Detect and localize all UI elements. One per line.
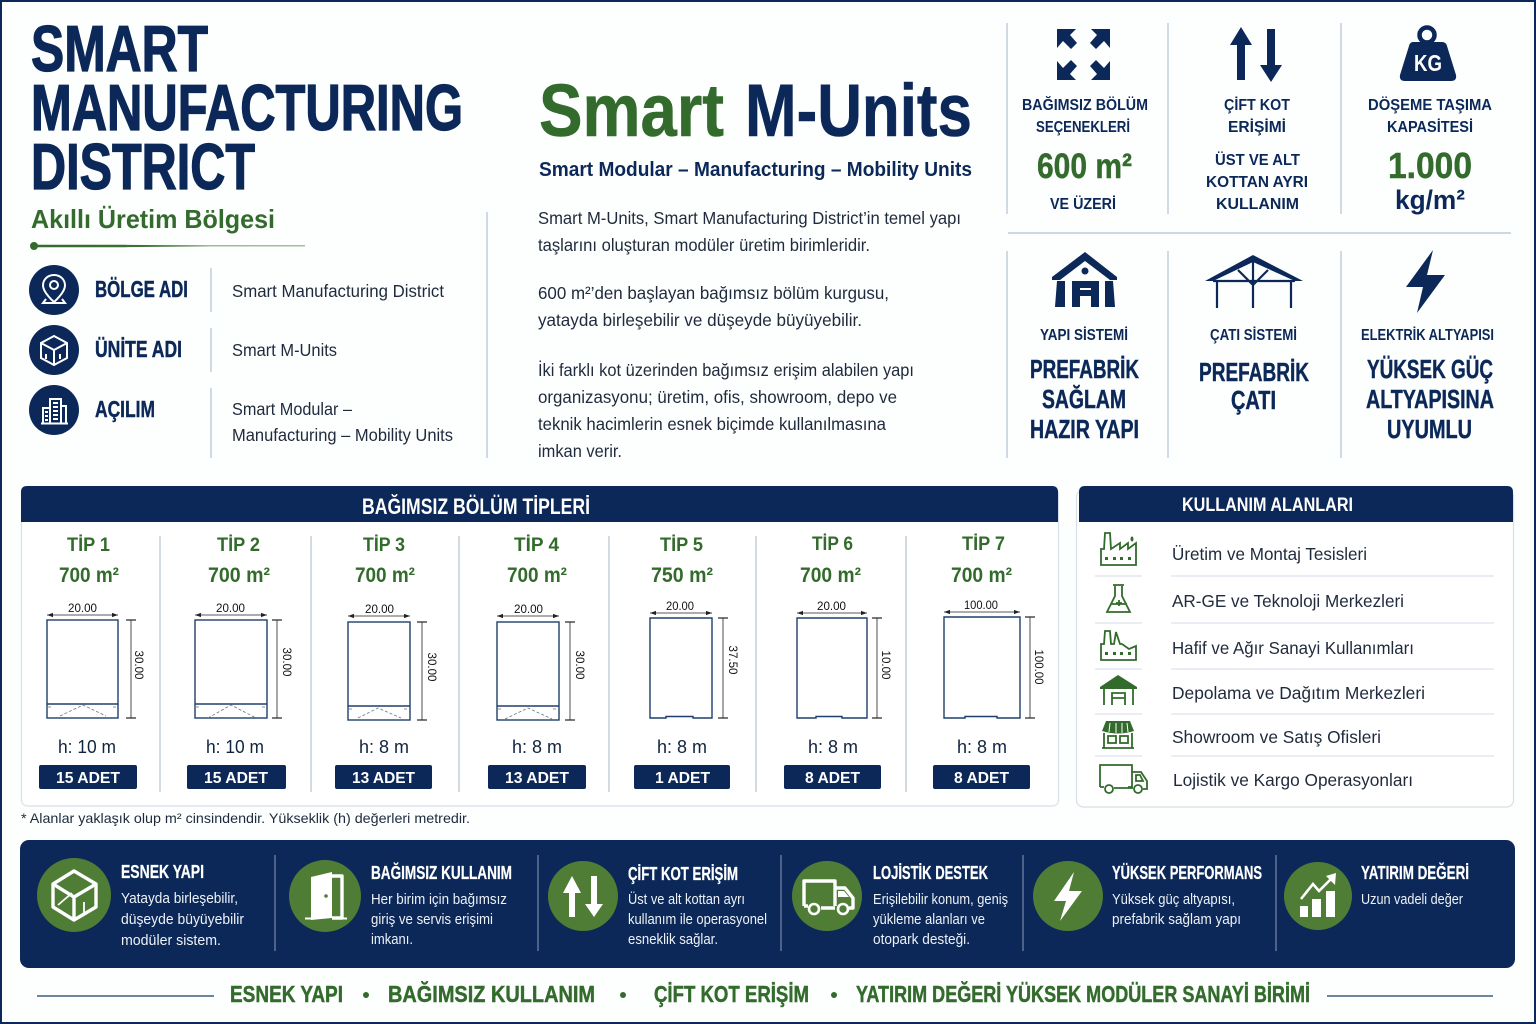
type card: Tip 1: TİP 1	[67, 535, 110, 556]
spec: Döşeme taşıma kapasitesi: 1.000	[1388, 145, 1472, 186]
icon: location pin	[29, 265, 79, 315]
type card: Tip 1	[39, 535, 144, 789]
icon: growth chart	[1284, 862, 1352, 930]
footnote: * Alanlar yaklaşık olup m² cinsindendir. Yükseklik (h) değerleri metredir.	[21, 810, 470, 826]
icon: lightning bolt	[1406, 250, 1445, 313]
floor plan	[497, 604, 585, 720]
count badge: 8 ADET	[805, 770, 860, 787]
spec: Çift kot erişimi	[1206, 27, 1308, 213]
type card: Tip 5: h: 8 m	[657, 737, 707, 757]
description text: Smart M-Units, Smart Manufacturing District’in temel yapı	[538, 208, 961, 228]
info row: Açılım: Smart Modular –	[232, 399, 352, 419]
feature: Bağımsız kullanım	[289, 860, 512, 948]
floor plan	[348, 604, 437, 720]
icon: shop	[1102, 721, 1134, 748]
floor plan: 100.00	[1032, 650, 1044, 684]
description text: yatayda birleşebilir ve düşeyde büyüyebilir.	[538, 310, 862, 330]
floor plan: 20.00	[666, 601, 694, 613]
floor plan: 10.00	[879, 650, 891, 680]
floor plan: 37.50	[726, 646, 738, 674]
type card: Tip 4	[488, 535, 586, 789]
usage row: Hafif ve Ağır Sanayi	[1101, 631, 1414, 660]
usage row: Depolama ve Dağıtım: Depolama ve Dağıtım Merkezleri	[1172, 683, 1425, 703]
floor plan: 20.00	[68, 603, 97, 615]
info row: Açılım: AÇILIM	[95, 396, 155, 422]
spec: Çatı sistemi: PREFABRİK	[1199, 357, 1309, 387]
spec: Bağımsız bölüm seçenekleri: BAĞIMSIZ BÖLÜM	[1022, 95, 1148, 114]
spec: Yapı sistemi: YAPI SİSTEMİ	[1040, 326, 1128, 344]
type card: Tip 7: h: 8 m	[957, 737, 1007, 757]
info row: Bölge adı: Smart Manufacturing District	[232, 281, 444, 301]
spec: Döşeme taşıma kapasitesi: DÖŞEME TAŞIMA	[1368, 95, 1492, 114]
floor plan	[195, 603, 292, 718]
icon: truck	[1100, 765, 1147, 793]
description text: taşlarını oluşturan modüler üretim birimleridir.	[538, 235, 870, 255]
count badge: 15 ADET	[56, 770, 120, 787]
panel header	[21, 486, 1058, 522]
count badge: 8 ADET	[954, 770, 1009, 787]
type card: Tip 6	[784, 534, 891, 789]
type card: Tip 1: h: 10 m	[58, 737, 116, 757]
count badge	[933, 765, 1030, 789]
icon: KG weight: KG	[1414, 50, 1442, 76]
icon: cube	[37, 858, 111, 932]
type card: Tip 7	[933, 534, 1044, 789]
count badge: 13 ADET	[505, 770, 569, 787]
count badge	[187, 765, 286, 789]
feature: Yatırım değeri: Uzun vadeli değer	[1361, 891, 1463, 908]
icon: up and down arrows	[1230, 27, 1282, 82]
slogan strip: ESNEK YAPI	[230, 981, 343, 1007]
feature: Çift kot erişim: kullanım ile operasyonel	[628, 911, 767, 928]
info row: Açılım	[29, 385, 453, 458]
feature: Esnek yapı: ESNEK YAPI	[121, 861, 204, 882]
type card: Tip 1: 700 m²	[59, 564, 119, 587]
spec: Bağımsız bölüm seçenekleri	[1022, 29, 1148, 213]
type card: Tip 6: 700 m²	[800, 564, 861, 587]
floor plan: 30.00	[573, 650, 585, 680]
info row: Ünite adı: Smart M-Units	[232, 340, 337, 360]
feature: Yüksek performans: YÜKSEK PERFORMANS	[1112, 862, 1262, 883]
icon: flask	[1107, 585, 1130, 612]
type card: Tip 3: TİP 3	[363, 535, 405, 556]
icon: prefabricated building	[1052, 252, 1117, 307]
info row: Açılım: Manufacturing – Mobility Units	[232, 425, 453, 445]
spec: Çift kot erişimi: ÜST VE ALT	[1215, 150, 1300, 169]
feature: Lojistik destek: yükleme alanları ve	[873, 911, 985, 928]
spec: Çatı sistemi	[1199, 255, 1309, 415]
usage row: Lojistik	[1100, 765, 1413, 793]
feature: Yatırım değeri: YATIRIM DEĞERİ	[1361, 862, 1469, 883]
spec: Döşeme taşıma kapasitesi	[1368, 28, 1492, 215]
info row: Bölge adı	[29, 265, 444, 315]
spec: Bağımsız bölüm seçenekleri: VE ÜZERİ	[1050, 194, 1116, 213]
type card: Tip 5: 750 m²	[651, 564, 713, 587]
feature: Bağımsız kullanım: Her birim için bağımsız	[371, 891, 507, 908]
spec: Çift kot erişimi: ÇİFT KOT	[1224, 96, 1290, 114]
feature: Yatırım değeri	[1284, 862, 1469, 930]
spec: Çift kot erişimi: ERİŞİMİ	[1228, 118, 1286, 136]
type card: Tip 2: h: 10 m	[206, 737, 264, 757]
spec: Elektrik altyapısı: YÜKSEK GÜÇ	[1367, 354, 1493, 384]
feature: Çift kot erişim: esneklik sağlar.	[628, 931, 718, 948]
spec: Döşeme taşıma kapasitesi: kg/m²	[1395, 185, 1465, 215]
tagline: Smart Modular – Manufacturing – Mobility Units	[539, 159, 972, 181]
feature: Esnek yapı: Yatayda birleşebilir,	[121, 890, 238, 907]
type card: Tip 4: TİP 4	[514, 535, 559, 556]
floor plan: 30.00	[132, 650, 144, 680]
description text	[538, 208, 961, 461]
count badge	[39, 765, 137, 789]
description text: 600 m²’den başlayan bağımsız bölüm kurgusu,	[538, 283, 889, 303]
feature: Çift kot erişim	[548, 861, 767, 948]
panel header: BAĞIMSIZ BÖLÜM TİPLERİ	[362, 494, 590, 519]
info row: Bölge adı: BÖLGE ADI	[95, 276, 188, 302]
type card: Tip 2: TİP 2	[217, 535, 260, 556]
spec: Bağımsız bölüm seçenekleri: 600 m²	[1037, 147, 1132, 186]
icon: warehouse	[1100, 675, 1137, 705]
type card: Tip 2: 700 m²	[208, 564, 270, 587]
feature: Esnek yapı: modüler sistem.	[121, 932, 221, 949]
slogan strip: BAĞIMSIZ KULLANIM	[388, 980, 595, 1007]
subtitle: Akıllı Üretim Bölgesi: Akıllı Üretim Bölgesi	[31, 204, 275, 234]
floor plan	[944, 600, 1044, 718]
usage row: AR-GE: AR-GE ve Teknoloji Merkezleri	[1172, 591, 1404, 611]
type card: Tip 6: TİP 6	[812, 534, 853, 555]
spec: Bağımsız bölüm seçenekleri: SEÇENEKLERİ	[1036, 118, 1130, 136]
floor plan	[47, 603, 144, 718]
feature: Bağımsız kullanım: giriş ve servis erişimi	[371, 911, 493, 928]
spec: Elektrik altyapısı: ALTYAPISINA	[1366, 384, 1494, 414]
floor plan: 20.00	[216, 603, 245, 615]
panel: Kullanım alanları	[1076, 486, 1514, 807]
type card: Tip 5: TİP 5	[660, 535, 703, 556]
feature: Yüksek performans: prefabrik sağlam yapı	[1112, 911, 1241, 928]
title: Smart Manufacturing District	[31, 12, 463, 203]
feature: Lojistik destek	[792, 861, 1008, 948]
feature: Bağımsız kullanım: imkanı.	[371, 931, 413, 948]
type card: Tip 7: TİP 7	[962, 534, 1005, 555]
title: Smart Manufacturing District: DISTRICT	[31, 130, 255, 203]
spec: Yapı sistemi: HAZIR YAPI	[1030, 414, 1139, 444]
spec: Elektrik altyapısı: ELEKTRİK ALTYAPISI	[1361, 326, 1494, 344]
type card: Tip 5	[634, 535, 738, 789]
panel header	[1079, 486, 1513, 522]
type card: Tip 4: h: 8 m	[512, 737, 562, 757]
description text: teknik hacimlerin esnek biçimde kullanılmasına	[538, 414, 886, 434]
feature: Esnek yapı	[37, 858, 244, 949]
count badge	[784, 765, 881, 789]
count badge: 15 ADET	[204, 770, 268, 787]
spec: Döşeme taşıma kapasitesi: KAPASİTESİ	[1387, 118, 1473, 136]
floor plan	[650, 601, 738, 718]
info row: Ünite adı: ÜNİTE ADI	[95, 336, 182, 362]
usage row: Üretim ve Montaj	[1101, 533, 1367, 565]
type card: Tip 3: h: 8 m	[359, 737, 409, 757]
heading: Smart M-Units: M-Units	[745, 69, 972, 152]
floor plan: 20.00	[817, 601, 846, 613]
spec: Yapı sistemi: SAĞLAM	[1042, 384, 1126, 414]
heading: Smart M-Units: Smart	[539, 69, 724, 152]
usage row: Lojistik: Lojistik ve Kargo Operasyonları	[1173, 770, 1413, 790]
panel: feature band	[20, 840, 1515, 968]
icon: up and down arrows	[548, 861, 618, 931]
heading: Smart M-Units	[539, 69, 972, 152]
icon: door	[289, 860, 361, 932]
spec: Elektrik altyapısı	[1361, 250, 1494, 444]
usage row: Üretim ve Montaj: Üretim ve Montaj Tesisleri	[1172, 544, 1367, 564]
usage row: Depolama ve Dağıtım	[1100, 675, 1425, 705]
spec: Çatı sistemi: ÇATI SİSTEMİ	[1210, 326, 1297, 344]
title: Smart Manufacturing District: SMART	[31, 12, 208, 85]
spec: Yapı sistemi	[1030, 252, 1139, 444]
icon: KG weight	[1400, 28, 1456, 81]
slogan strip	[230, 980, 1310, 1007]
type card: Tip 4: 700 m²	[507, 564, 567, 587]
icon: roof truss	[1205, 255, 1303, 308]
description text: imkan verir.	[538, 441, 622, 461]
floor plan: 100.00	[964, 600, 998, 612]
type card: Tip 3	[335, 535, 437, 789]
floor plan: 20.00	[365, 604, 394, 616]
spec: Çatı sistemi: ÇATI	[1231, 385, 1276, 415]
icon: box	[29, 325, 79, 375]
spec: Yapı sistemi: PREFABRİK	[1030, 354, 1139, 384]
slogan strip: ÇİFT KOT ERİŞİM	[654, 981, 809, 1007]
usage row: Showroom	[1102, 721, 1381, 748]
feature: Lojistik destek: otopark desteği.	[873, 931, 970, 948]
icon: truck	[792, 861, 862, 931]
feature: Yüksek performans	[1033, 861, 1262, 931]
feature: Esnek yapı: düşeyde büyüyebilir	[121, 911, 244, 928]
panel: Bağımsız bölüm tipleri	[21, 486, 1058, 806]
icon: factory with chimneys	[1101, 631, 1136, 660]
floor plan: 30.00	[280, 648, 292, 676]
usage row: Hafif ve Ağır Sanayi: Hafif ve Ağır Sanayi Kullanımları	[1172, 638, 1414, 658]
spec: Çift kot erişimi: KOTTAN AYRI	[1206, 174, 1308, 191]
feature: Yüksek performans: Yüksek güç altyapısı,	[1112, 891, 1235, 908]
floor plan	[797, 601, 891, 718]
usage row: Showroom: Showroom ve Satış Ofisleri	[1172, 727, 1381, 747]
slogan strip: YATIRIM DEĞERİ YÜKSEK MODÜLER SANAYİ BİRİMİ	[856, 980, 1310, 1007]
type card: Tip 2	[187, 535, 292, 789]
floor plan: 20.00	[514, 604, 543, 616]
feature: Lojistik destek: LOJİSTİK DESTEK	[873, 862, 988, 883]
feature: Lojistik destek: Erişilebilir konum, geniş	[873, 891, 1008, 908]
count badge	[634, 765, 730, 789]
icon: buildings	[29, 385, 79, 435]
spec: Elektrik altyapısı: UYUMLU	[1387, 414, 1472, 444]
feature: Çift kot erişim: Üst ve alt kottan ayrı	[628, 890, 745, 908]
floor plan: 30.00	[425, 652, 437, 682]
type card: Tip 7: 700 m²	[951, 564, 1012, 587]
feature: Çift kot erişim: ÇİFT KOT ERİŞİM	[628, 863, 738, 884]
icon: expand arrows	[1057, 29, 1110, 80]
panel header: KULLANIM ALANLARI	[1182, 495, 1353, 516]
type card: Tip 3: 700 m²	[355, 564, 415, 587]
icon: lightning bolt	[1033, 861, 1103, 931]
type card: Tip 6: h: 8 m	[808, 737, 858, 757]
spec: Çift kot erişimi: KULLANIM	[1216, 196, 1299, 213]
count badge	[335, 765, 432, 789]
icon: factory	[1101, 533, 1136, 565]
usage row: AR-GE	[1107, 585, 1404, 612]
title: Smart Manufacturing District: MANUFACTURING	[31, 71, 463, 144]
count badge: 1 ADET	[655, 770, 710, 787]
count badge: 13 ADET	[352, 770, 415, 787]
subtitle rule with dot	[30, 242, 305, 250]
feature: Bağımsız kullanım: BAĞIMSIZ KULLANIM	[371, 862, 512, 883]
description text: organizasyonu; üretim, ofis, showroom, depo ve	[538, 387, 897, 407]
count badge	[488, 765, 586, 789]
description text: İki farklı kot üzerinden bağımsız erişim alabilen yapı	[538, 360, 914, 380]
info row: Ünite adı	[29, 325, 337, 375]
